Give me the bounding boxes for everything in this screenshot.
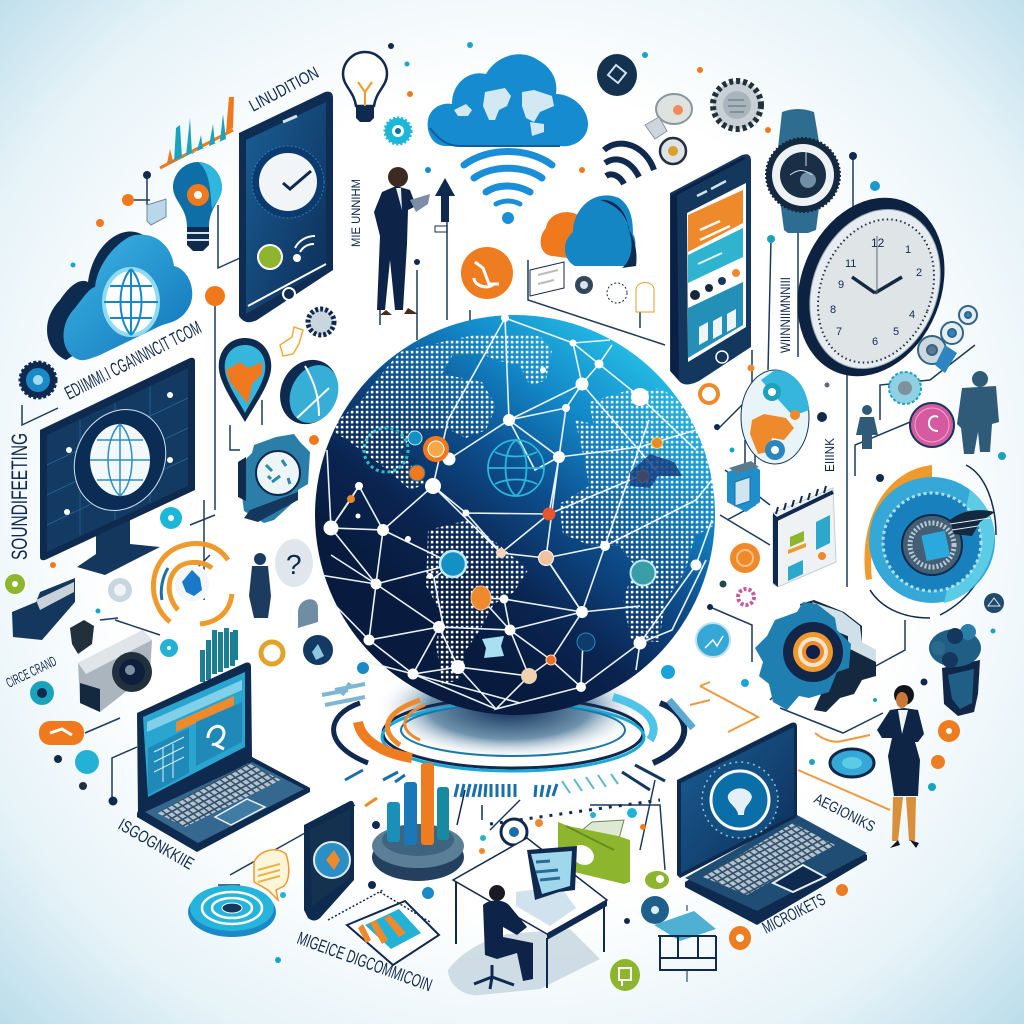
icon: cyan badge <box>661 604 749 687</box>
icon: big wall clock: 5 <box>893 326 899 338</box>
dark land patch right <box>630 454 682 488</box>
icon: right small dots <box>836 452 1006 896</box>
icon: laptop right <box>677 722 867 925</box>
continents: dotted map <box>328 334 725 684</box>
icon: arrow up <box>414 178 455 265</box>
icon: smartphone tilted <box>670 154 751 384</box>
icon: big wall clock: 12 <box>871 236 885 250</box>
network nodes coloured <box>347 428 662 684</box>
icon: person and question mark: ? <box>286 549 302 580</box>
icon: left small dots and box <box>5 562 132 790</box>
icon: businesswoman <box>877 685 924 848</box>
icon: bulb outline top <box>343 52 387 122</box>
icon: small circles by desk <box>479 808 646 879</box>
icon: canopy stall <box>654 905 716 982</box>
icon: spiral disc <box>188 885 276 937</box>
icon: 3D podium bar chart <box>372 763 464 881</box>
icon: businessman <box>374 167 430 315</box>
icon: small nodes and device <box>70 171 166 268</box>
icon: cloud orange and blue <box>541 195 637 268</box>
icon: map pin <box>219 338 271 422</box>
bar chart: top left <box>160 97 234 168</box>
icon: wifi blue <box>464 152 552 224</box>
shadow beneath globe <box>375 656 645 760</box>
label: bottom centre: MIGEICE DIGCOMMICOIN <box>295 928 435 995</box>
label: top left: LINUDITION <box>246 63 322 116</box>
icon: base rings under globe <box>322 683 693 782</box>
icon: monitor with globe <box>40 358 195 575</box>
icon: big wall clock: 4 <box>909 309 915 321</box>
icon: dark disc top <box>597 54 637 96</box>
label: vertical left: SOUNDIFEETING <box>7 433 32 560</box>
icon: laptop left <box>108 662 310 852</box>
label: lower right: MICROIKETS <box>759 890 828 938</box>
icon: large gear top <box>713 81 761 129</box>
icon: orange circle <box>461 247 513 299</box>
icon: tech disc <box>864 465 996 618</box>
icon: small document row <box>530 262 654 312</box>
icon: potted plant <box>929 624 981 716</box>
icon: gear cluster right <box>889 306 977 404</box>
icon: big wall clock: 8 <box>830 304 836 316</box>
icon: small teal gear <box>385 118 411 144</box>
label: above businessman: MIE UNNIHM <box>349 179 363 247</box>
icon: dark wifi <box>604 144 654 184</box>
icon: lens disc <box>270 350 348 434</box>
icon: orange pin dot <box>205 286 225 306</box>
icon: gadget cluster <box>645 94 692 164</box>
label: right of laptop: AEGIONIKS <box>811 790 878 836</box>
icon: gear left <box>20 362 56 398</box>
icon: big blue gear <box>755 600 876 712</box>
label: communication: EDIIMMI.I CGANNNCIT TCOM <box>62 318 205 404</box>
icon: world cloud <box>428 54 588 146</box>
icon: orange ring badge <box>709 510 760 605</box>
icon: big wall clock: 6 <box>872 336 878 348</box>
icon: people and pink ring <box>856 371 999 454</box>
icon: camera <box>78 630 152 712</box>
icon: green wallet <box>558 820 630 884</box>
icon: green badge bottom <box>610 918 640 991</box>
icon: big wall clock: 1 <box>905 244 911 256</box>
icon: calendar <box>773 486 836 587</box>
icon: blue box <box>727 461 760 512</box>
icon: small circles under target <box>160 635 369 674</box>
label: right vertical: EIIINK <box>822 438 837 472</box>
icon: orange badge near globe <box>700 385 827 452</box>
icon: teal oval <box>809 749 874 777</box>
icon: tick bars arc <box>455 765 665 825</box>
icon: chart card <box>328 890 439 965</box>
icon: top dots <box>388 42 880 388</box>
icon: big wall clock: 11 <box>845 258 856 270</box>
label: lower left: ISGOGNKKIIE <box>115 815 197 873</box>
icon: dots and dashes near laptop <box>275 798 434 963</box>
globe <box>315 314 725 715</box>
icon: speech bubble <box>254 850 289 900</box>
connector lines <box>22 156 975 885</box>
icon: tablet with clock <box>239 92 333 322</box>
icon: light bulb blue <box>173 162 222 251</box>
icon: small gear and star <box>280 309 334 356</box>
network lines <box>320 318 712 709</box>
icon: big wall clock: 2 <box>916 267 922 279</box>
icon: big wall clock: 9 <box>838 279 844 291</box>
globe centre emblem <box>488 440 544 496</box>
label: left small: CIRCE CRAND <box>3 653 59 691</box>
icon: orange line accents <box>690 682 890 810</box>
icon: big wall clock: 7 <box>836 326 842 338</box>
icon: orange ring bottom <box>729 926 751 950</box>
network nodes white <box>324 314 702 692</box>
icon: big wall clock <box>772 175 970 399</box>
icon: person and question mark <box>249 539 318 628</box>
label: right of phone: WIINNIIMNNIII <box>777 277 793 353</box>
icon: teal bars <box>200 628 238 682</box>
icon: leaf badge <box>641 871 669 924</box>
icon: concentric orange target <box>153 544 232 624</box>
icon: wristwatch <box>766 109 840 233</box>
icon: smartphone bottom <box>304 801 354 920</box>
icon: person at desk <box>448 838 607 995</box>
icon: patterned globe <box>741 370 809 464</box>
icon: cyan ring <box>160 507 182 529</box>
icon: gear with dial <box>238 434 319 523</box>
icon: cloud with globe <box>47 232 192 360</box>
